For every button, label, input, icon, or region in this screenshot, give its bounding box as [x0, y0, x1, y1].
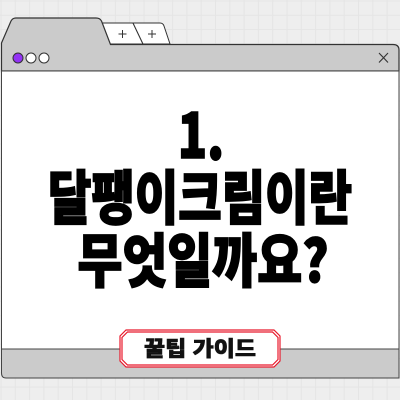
icon: close [379, 53, 388, 62]
badge: tip guide [120, 330, 280, 367]
window controls [13, 53, 49, 63]
title bar [2, 18, 399, 71]
content panel [2, 71, 399, 349]
title: 달팽이크림이란 [48, 153, 352, 236]
title: 1. [178, 88, 224, 177]
bottom bar [2, 349, 399, 378]
badge: tip guide: 꿀팁 가이드 [144, 333, 256, 363]
title [48, 88, 352, 299]
title: 무엇일까요? [78, 216, 328, 299]
inactive tabs [102, 23, 170, 44]
